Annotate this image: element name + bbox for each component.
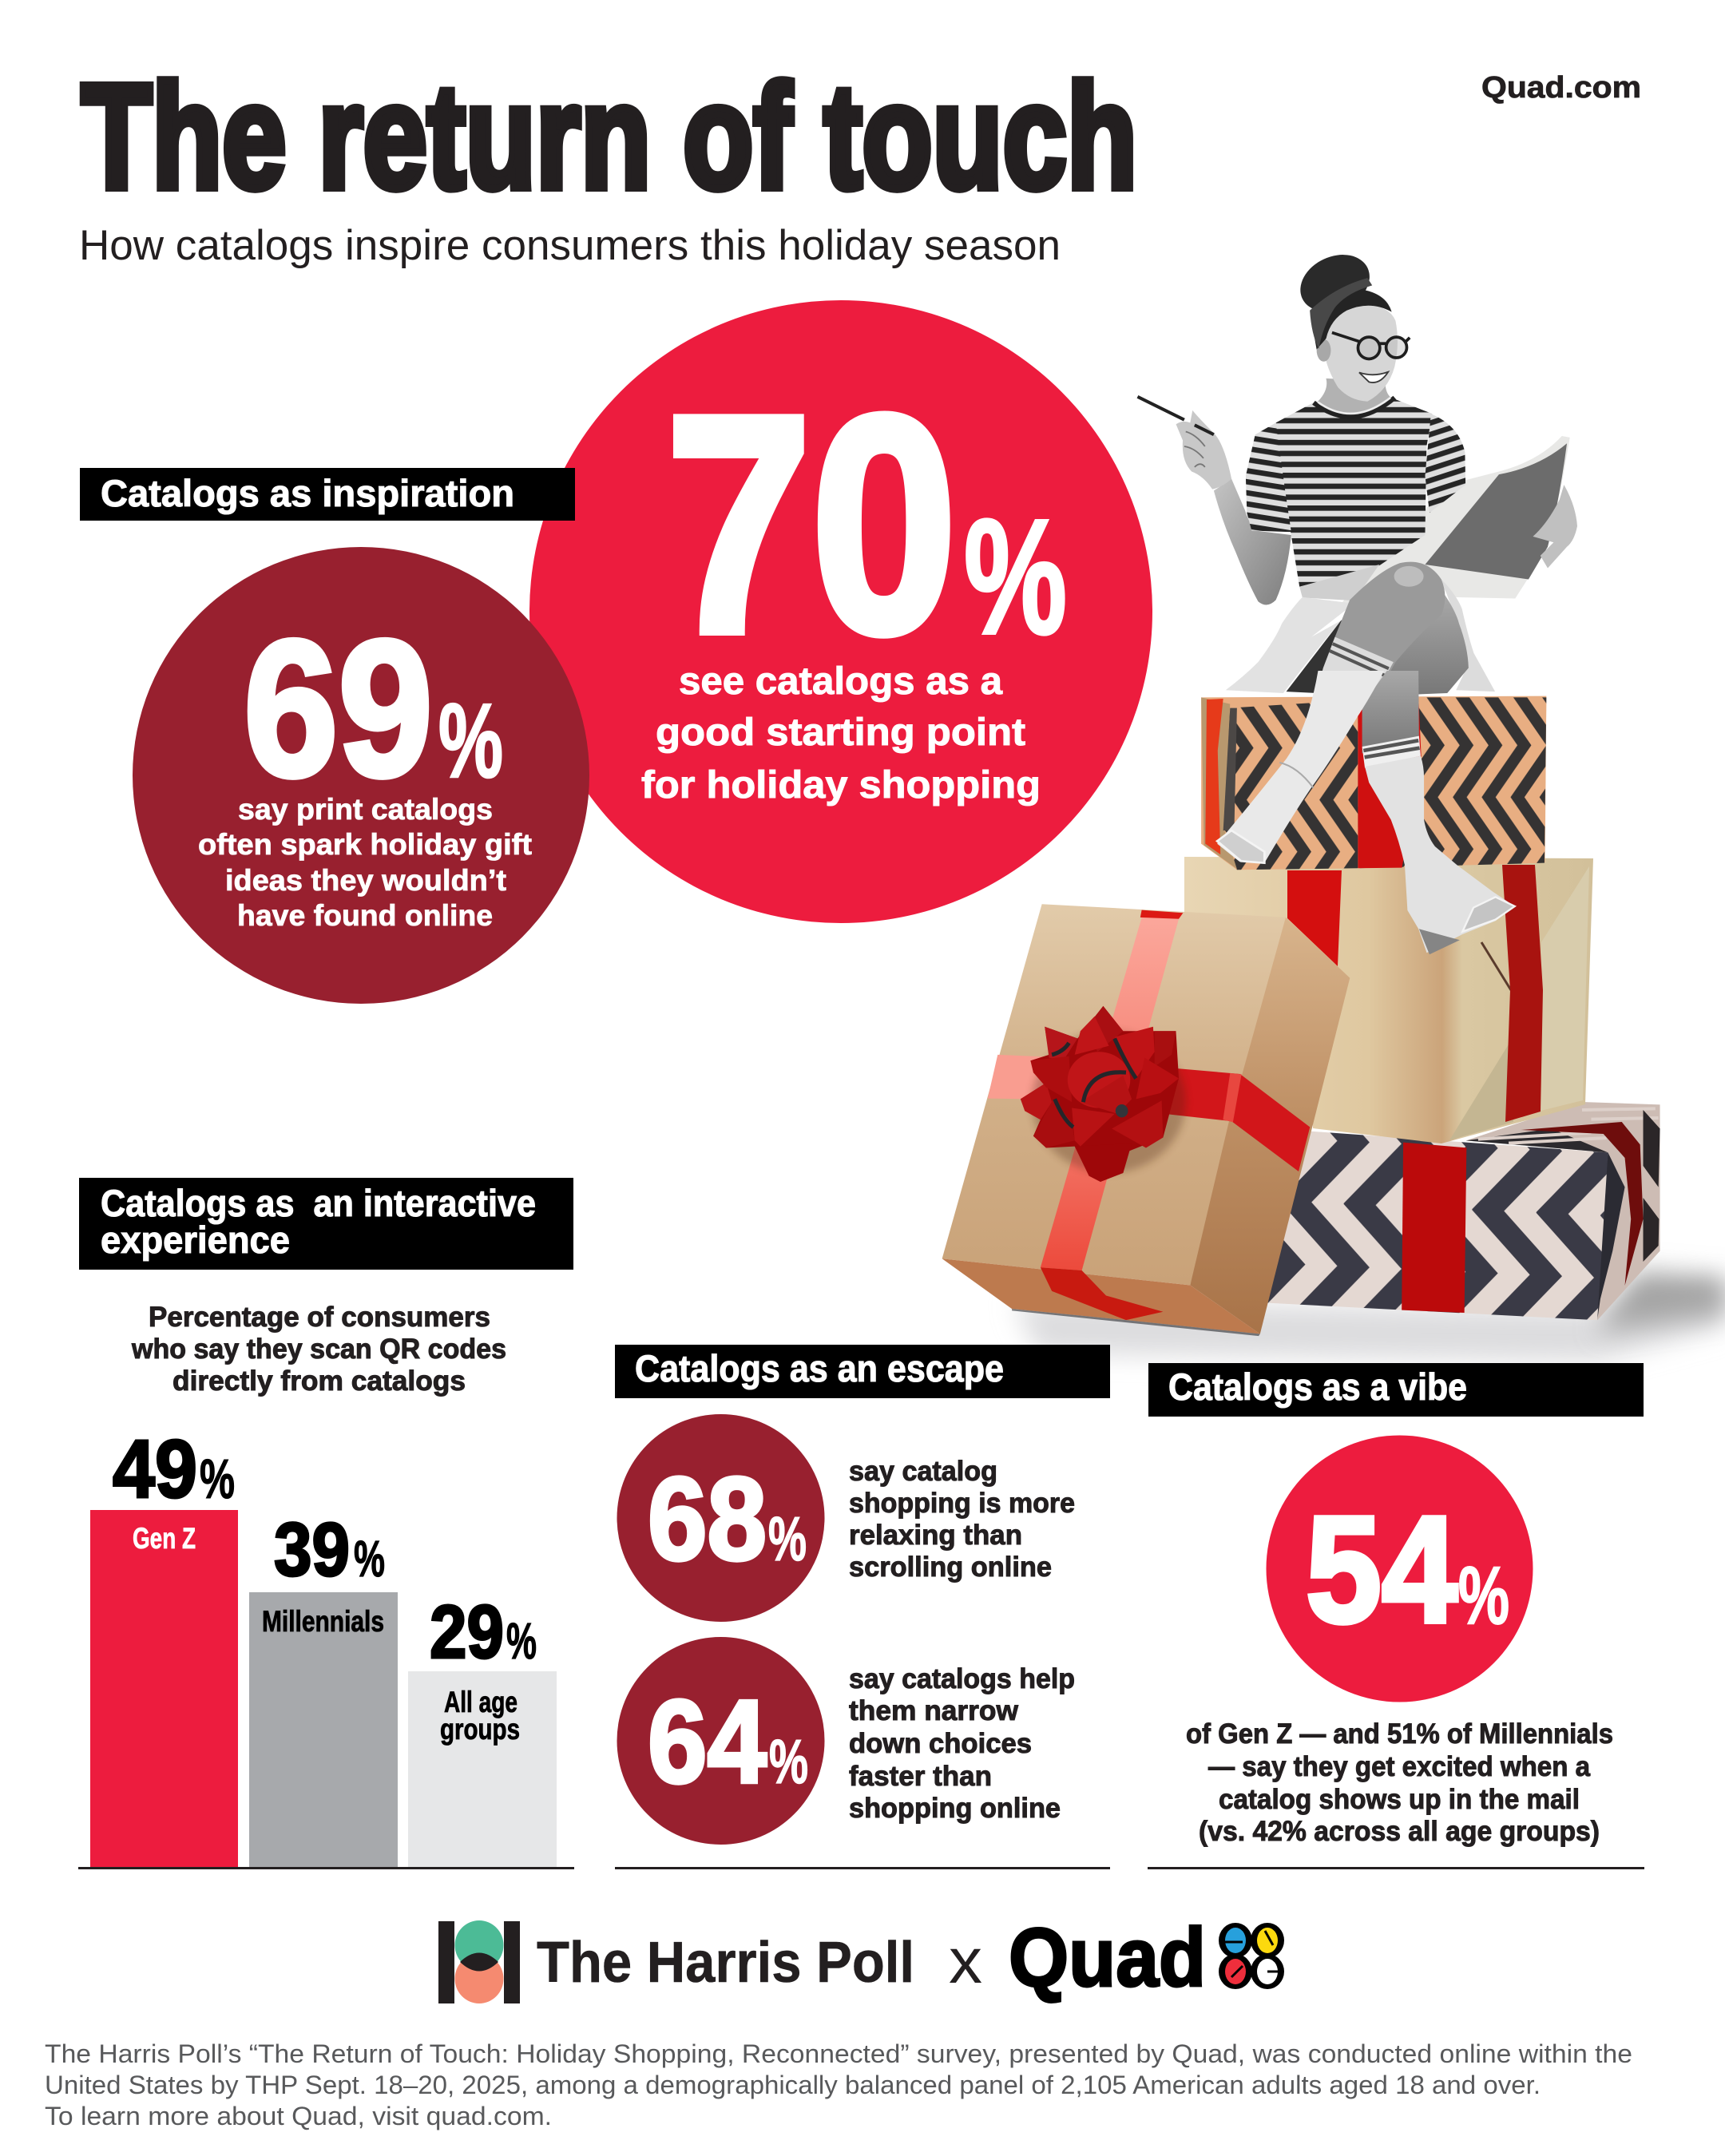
- caption 69%: say print catalogs: [238, 793, 493, 826]
- ear: [1317, 339, 1330, 362]
- heading: escape: [615, 1345, 1110, 1398]
- finger creases: [1184, 431, 1205, 467]
- catalog inside pages: [1425, 443, 1567, 580]
- caption 64%: them narrow: [849, 1695, 1019, 1726]
- stat circle: 54%: %: [1458, 1550, 1509, 1641]
- footnote: To learn more about Quad, visit quad.com.: [45, 2102, 552, 2130]
- left skirt: [1226, 597, 1354, 693]
- upper sock cuff: [1315, 637, 1394, 703]
- bun: [1291, 244, 1379, 323]
- gift box: top tan chevron: [1201, 696, 1546, 870]
- hair: [1313, 288, 1392, 350]
- gift box: bottom black and white chevron: [1267, 1102, 1660, 1320]
- heading: interactive experience: Catalogs as an interactive: [101, 1182, 536, 1224]
- stat circle: 68%: 68: [648, 1453, 767, 1585]
- caption 68%: relaxing than: [849, 1520, 1022, 1551]
- subtitle: How catalogs inspire consumers this holiday season: [79, 222, 1061, 269]
- stat circle: 54%: [1267, 1436, 1533, 1702]
- front sock and sandal: [1365, 756, 1515, 953]
- smile: [1359, 372, 1388, 382]
- caption 64%: down choices: [849, 1728, 1032, 1759]
- caption 64%: shopping online: [849, 1793, 1061, 1824]
- bar: all age groups: [408, 1590, 557, 1867]
- caption 69%: have found online: [237, 899, 493, 932]
- sock stripes: [1362, 736, 1421, 768]
- caption 54%: [1186, 1718, 1613, 1847]
- ribbon horizontal: [988, 1055, 1069, 1100]
- chart description: Percentage of consumers: [149, 1302, 490, 1333]
- footnote: [45, 2039, 1632, 2130]
- heading: vibe: [1148, 1363, 1644, 1417]
- stat circle: 64%: [617, 1637, 824, 1845]
- chart description: [131, 1302, 506, 1397]
- caption 54%: (vs. 42% across all age groups): [1199, 1816, 1600, 1847]
- glasses: [1332, 333, 1410, 359]
- woman reading a catalog (lower legs and shoes): [1217, 671, 1515, 954]
- bar: all age groups: 29: [430, 1590, 504, 1674]
- heading: interactive experience: [79, 1178, 573, 1270]
- percent sign: %: [438, 682, 503, 799]
- bow: [1021, 1006, 1179, 1182]
- heading: interactive experience: experience: [101, 1219, 290, 1261]
- bar: Millennials: Millennials: [262, 1605, 384, 1638]
- panel: interactive experience: [78, 1178, 574, 1869]
- caption 68%: scrolling online: [849, 1552, 1052, 1583]
- photo illustration: woman reading a catalog on stacked gift boxes: [942, 244, 1725, 1361]
- number 69: 69: [244, 600, 433, 817]
- ribbon vertical: [1041, 917, 1179, 1270]
- footnote: United States by THP Sept. 18–20, 2025, among a demographically balanced panel of 2,105 American adults aged 18 and over.: [45, 2071, 1541, 2099]
- caption 64%: [849, 1663, 1075, 1824]
- heading: vibe: Catalogs as a vibe: [1168, 1365, 1467, 1408]
- caption 68%: say catalog: [849, 1456, 997, 1487]
- face: [1326, 306, 1398, 402]
- gift box: front kraft paper with red ribbon and bow: [942, 904, 1350, 1336]
- heading: escape: Catalogs as an escape: [635, 1347, 1004, 1389]
- logo: The Harris Poll: [438, 1920, 914, 2003]
- bar: Gen Z: %: [200, 1448, 235, 1510]
- panel: escape: [615, 1345, 1110, 1869]
- stat circle: 70%: [529, 300, 1152, 923]
- bar: Gen Z: 49: [113, 1423, 197, 1515]
- caption 69%: [198, 793, 532, 932]
- bar: all age groups: %: [506, 1612, 537, 1670]
- bar: all age groups: All age: [444, 1686, 518, 1718]
- bar: Millennials: [249, 1508, 398, 1867]
- bar: Gen Z: Gen Z: [133, 1522, 196, 1555]
- stat circle: 68%: %: [768, 1504, 807, 1574]
- caption 70%: see catalogs as a: [679, 660, 1002, 703]
- bar chart: [78, 1423, 574, 1869]
- caption 69%: ideas they wouldn’t: [225, 864, 506, 897]
- floor shadow: [1014, 1271, 1725, 1361]
- under leg: [1376, 594, 1469, 696]
- caption 64%: faster than: [849, 1761, 992, 1792]
- stat circle: 68%: [617, 1414, 824, 1622]
- under skirt shadow: [1287, 608, 1358, 693]
- woman reading a catalog (upper body): [1137, 244, 1577, 703]
- logo: The Harris Poll: The Harris Poll: [537, 1931, 914, 1995]
- hand: [1176, 410, 1231, 489]
- multiplication x: x: [949, 1925, 982, 1996]
- chart description: who say they scan QR codes: [131, 1334, 506, 1365]
- chart description: directly from catalogs: [172, 1365, 466, 1397]
- striped shirt: [1240, 396, 1477, 591]
- caption 68%: shopping is more: [849, 1488, 1075, 1519]
- catalog back cover: [1311, 436, 1570, 637]
- logo: Quad: Quad: [1009, 1912, 1206, 2004]
- bow shadow: [1032, 1031, 1186, 1173]
- bar: Millennials: %: [354, 1530, 385, 1587]
- right skirt: [1441, 580, 1495, 692]
- caption 69%: often spark holiday gift: [198, 828, 532, 861]
- gift box: middle kraft paper: [1184, 857, 1593, 1143]
- caption 54%: catalog shows up in the mail: [1219, 1784, 1580, 1815]
- bar: Millennials: 39: [274, 1508, 350, 1592]
- back shin: [1362, 671, 1419, 753]
- raised arm: [1214, 479, 1291, 604]
- knee highlight: [1394, 566, 1424, 587]
- bar: Gen Z: [90, 1423, 238, 1867]
- stat circle: 64%: 64: [648, 1676, 767, 1808]
- neck: [1317, 378, 1391, 422]
- headband: [1310, 278, 1372, 349]
- source link: Quad.com: [1481, 71, 1641, 105]
- crossed sock and sandal: [1217, 671, 1384, 863]
- stat circle: 69%: [133, 547, 589, 1004]
- caption 64%: say catalogs help: [849, 1663, 1075, 1694]
- pencil: [1137, 397, 1214, 434]
- top thigh: [1332, 562, 1445, 676]
- heading: catalogs as inspiration: [80, 468, 575, 521]
- footnote: The Harris Poll’s “The Return of Touch: Holiday Shopping, Reconnected” survey, presented by Quad, was conducted online within the: [45, 2039, 1632, 2068]
- bar: all age groups: groups: [440, 1713, 520, 1746]
- caption 70%: good starting point: [656, 711, 1025, 754]
- caption 68%: [849, 1456, 1075, 1583]
- heading: catalogs as inspiration: Catalogs as inspiration: [101, 472, 514, 514]
- right hand: [1533, 485, 1577, 568]
- number 70: 70: [666, 352, 957, 696]
- panel: vibe: [1148, 1363, 1644, 1869]
- title: The return of touch: [81, 54, 1137, 220]
- caption 70%: [641, 660, 1041, 807]
- caption 54%: of Gen Z — and 51% of Millennials: [1186, 1718, 1613, 1750]
- logos: [438, 1912, 1284, 2004]
- caption 54%: — say they get excited when a: [1208, 1751, 1590, 1782]
- stat circle: 54%: 54: [1306, 1485, 1457, 1655]
- stat circle: 64%: %: [769, 1726, 808, 1797]
- waist: [1299, 565, 1379, 600]
- caption 70%: for holiday shopping: [641, 764, 1041, 807]
- percent sign: %: [964, 485, 1067, 668]
- quad icon: [1219, 1923, 1284, 1989]
